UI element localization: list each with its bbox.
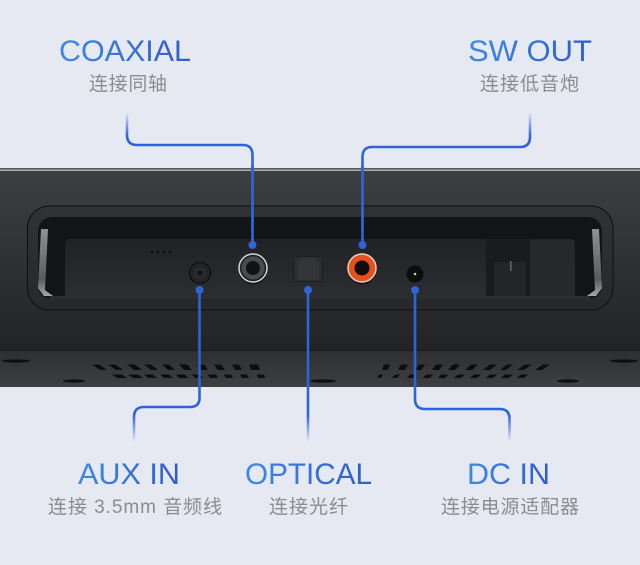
connector: optical <box>304 286 312 442</box>
label: sw out: 连接低音炮 <box>480 73 579 95</box>
label: dc in: 连接电源适配器 <box>441 496 579 518</box>
label: coaxial: COAXIAL <box>59 35 191 68</box>
label: optical: 连接光纤 <box>269 496 348 518</box>
soundbar body <box>0 168 640 387</box>
label: dc in <box>441 458 579 518</box>
port: dc in <box>406 266 424 282</box>
port: optical <box>294 256 322 282</box>
port: subwoofer out <box>348 254 376 284</box>
label: optical <box>245 458 372 518</box>
label: optical: OPTICAL <box>245 458 372 491</box>
label: dc in: DC IN <box>467 458 550 491</box>
connector: aux in <box>134 286 204 442</box>
port recess <box>28 206 613 310</box>
slide switch <box>486 239 574 296</box>
port: aux in jack <box>190 262 210 284</box>
connector: coaxial <box>127 112 256 249</box>
label: coaxial: 连接同轴 <box>89 73 167 95</box>
connector: sw out <box>358 112 530 249</box>
label: aux in: 连接 3.5mm 音频线 <box>48 496 222 518</box>
label: sw out <box>468 35 592 95</box>
rubber feet <box>2 359 638 383</box>
label: coaxial <box>59 35 191 95</box>
label: aux in <box>48 458 222 518</box>
label: aux in: AUX IN <box>78 458 180 491</box>
label: sw out: SW OUT <box>468 35 592 68</box>
port: coaxial <box>238 254 268 284</box>
speaker vents <box>92 364 550 378</box>
connector: dc in <box>411 286 510 442</box>
